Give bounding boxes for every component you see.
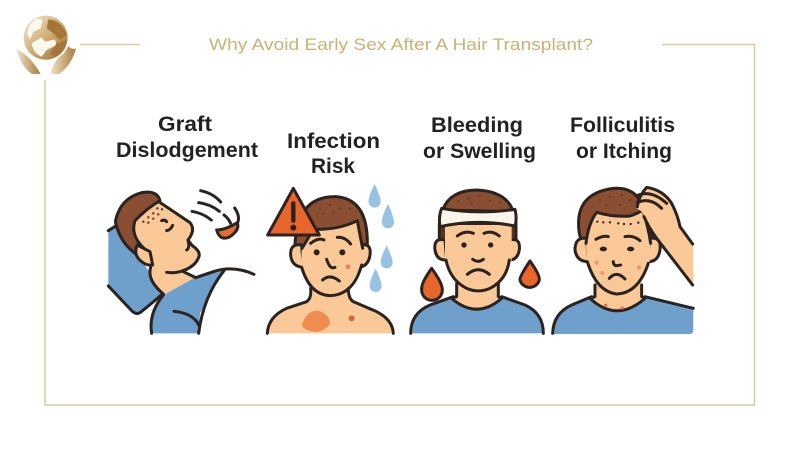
heading: Infection Risk: Infection — [287, 130, 380, 153]
gold frame — [45, 44, 754, 405]
heading: Folliculitis or Itching: Folliculitis — [570, 114, 675, 137]
heading: Folliculitis or Itching: or Itching — [576, 140, 672, 163]
heading: Graft Dislodgement — [116, 113, 258, 162]
heading: Folliculitis or Itching — [570, 114, 675, 163]
heading: Bleeding or Swelling: Bleeding — [431, 114, 523, 137]
illustration: man lying down, graft dislodged — [108, 191, 254, 333]
heading: Graft Dislodgement: Graft — [158, 113, 212, 136]
heading: Graft Dislodgement: Dislodgement — [116, 139, 258, 162]
illustration: man scratching scalp — [553, 187, 693, 334]
heading: Infection Risk: Risk — [311, 155, 355, 178]
heading: Bleeding or Swelling — [423, 114, 536, 163]
title: Why Avoid Early Sex After A Hair Transplant? — [209, 35, 593, 54]
logo: globe in hands — [17, 16, 76, 74]
heading: Bleeding or Swelling: or Swelling — [423, 140, 536, 163]
illustration: man with infection and warning sign — [267, 184, 394, 333]
illustration: man with bandage and blood drops — [411, 190, 543, 333]
heading: Infection Risk — [287, 130, 380, 178]
